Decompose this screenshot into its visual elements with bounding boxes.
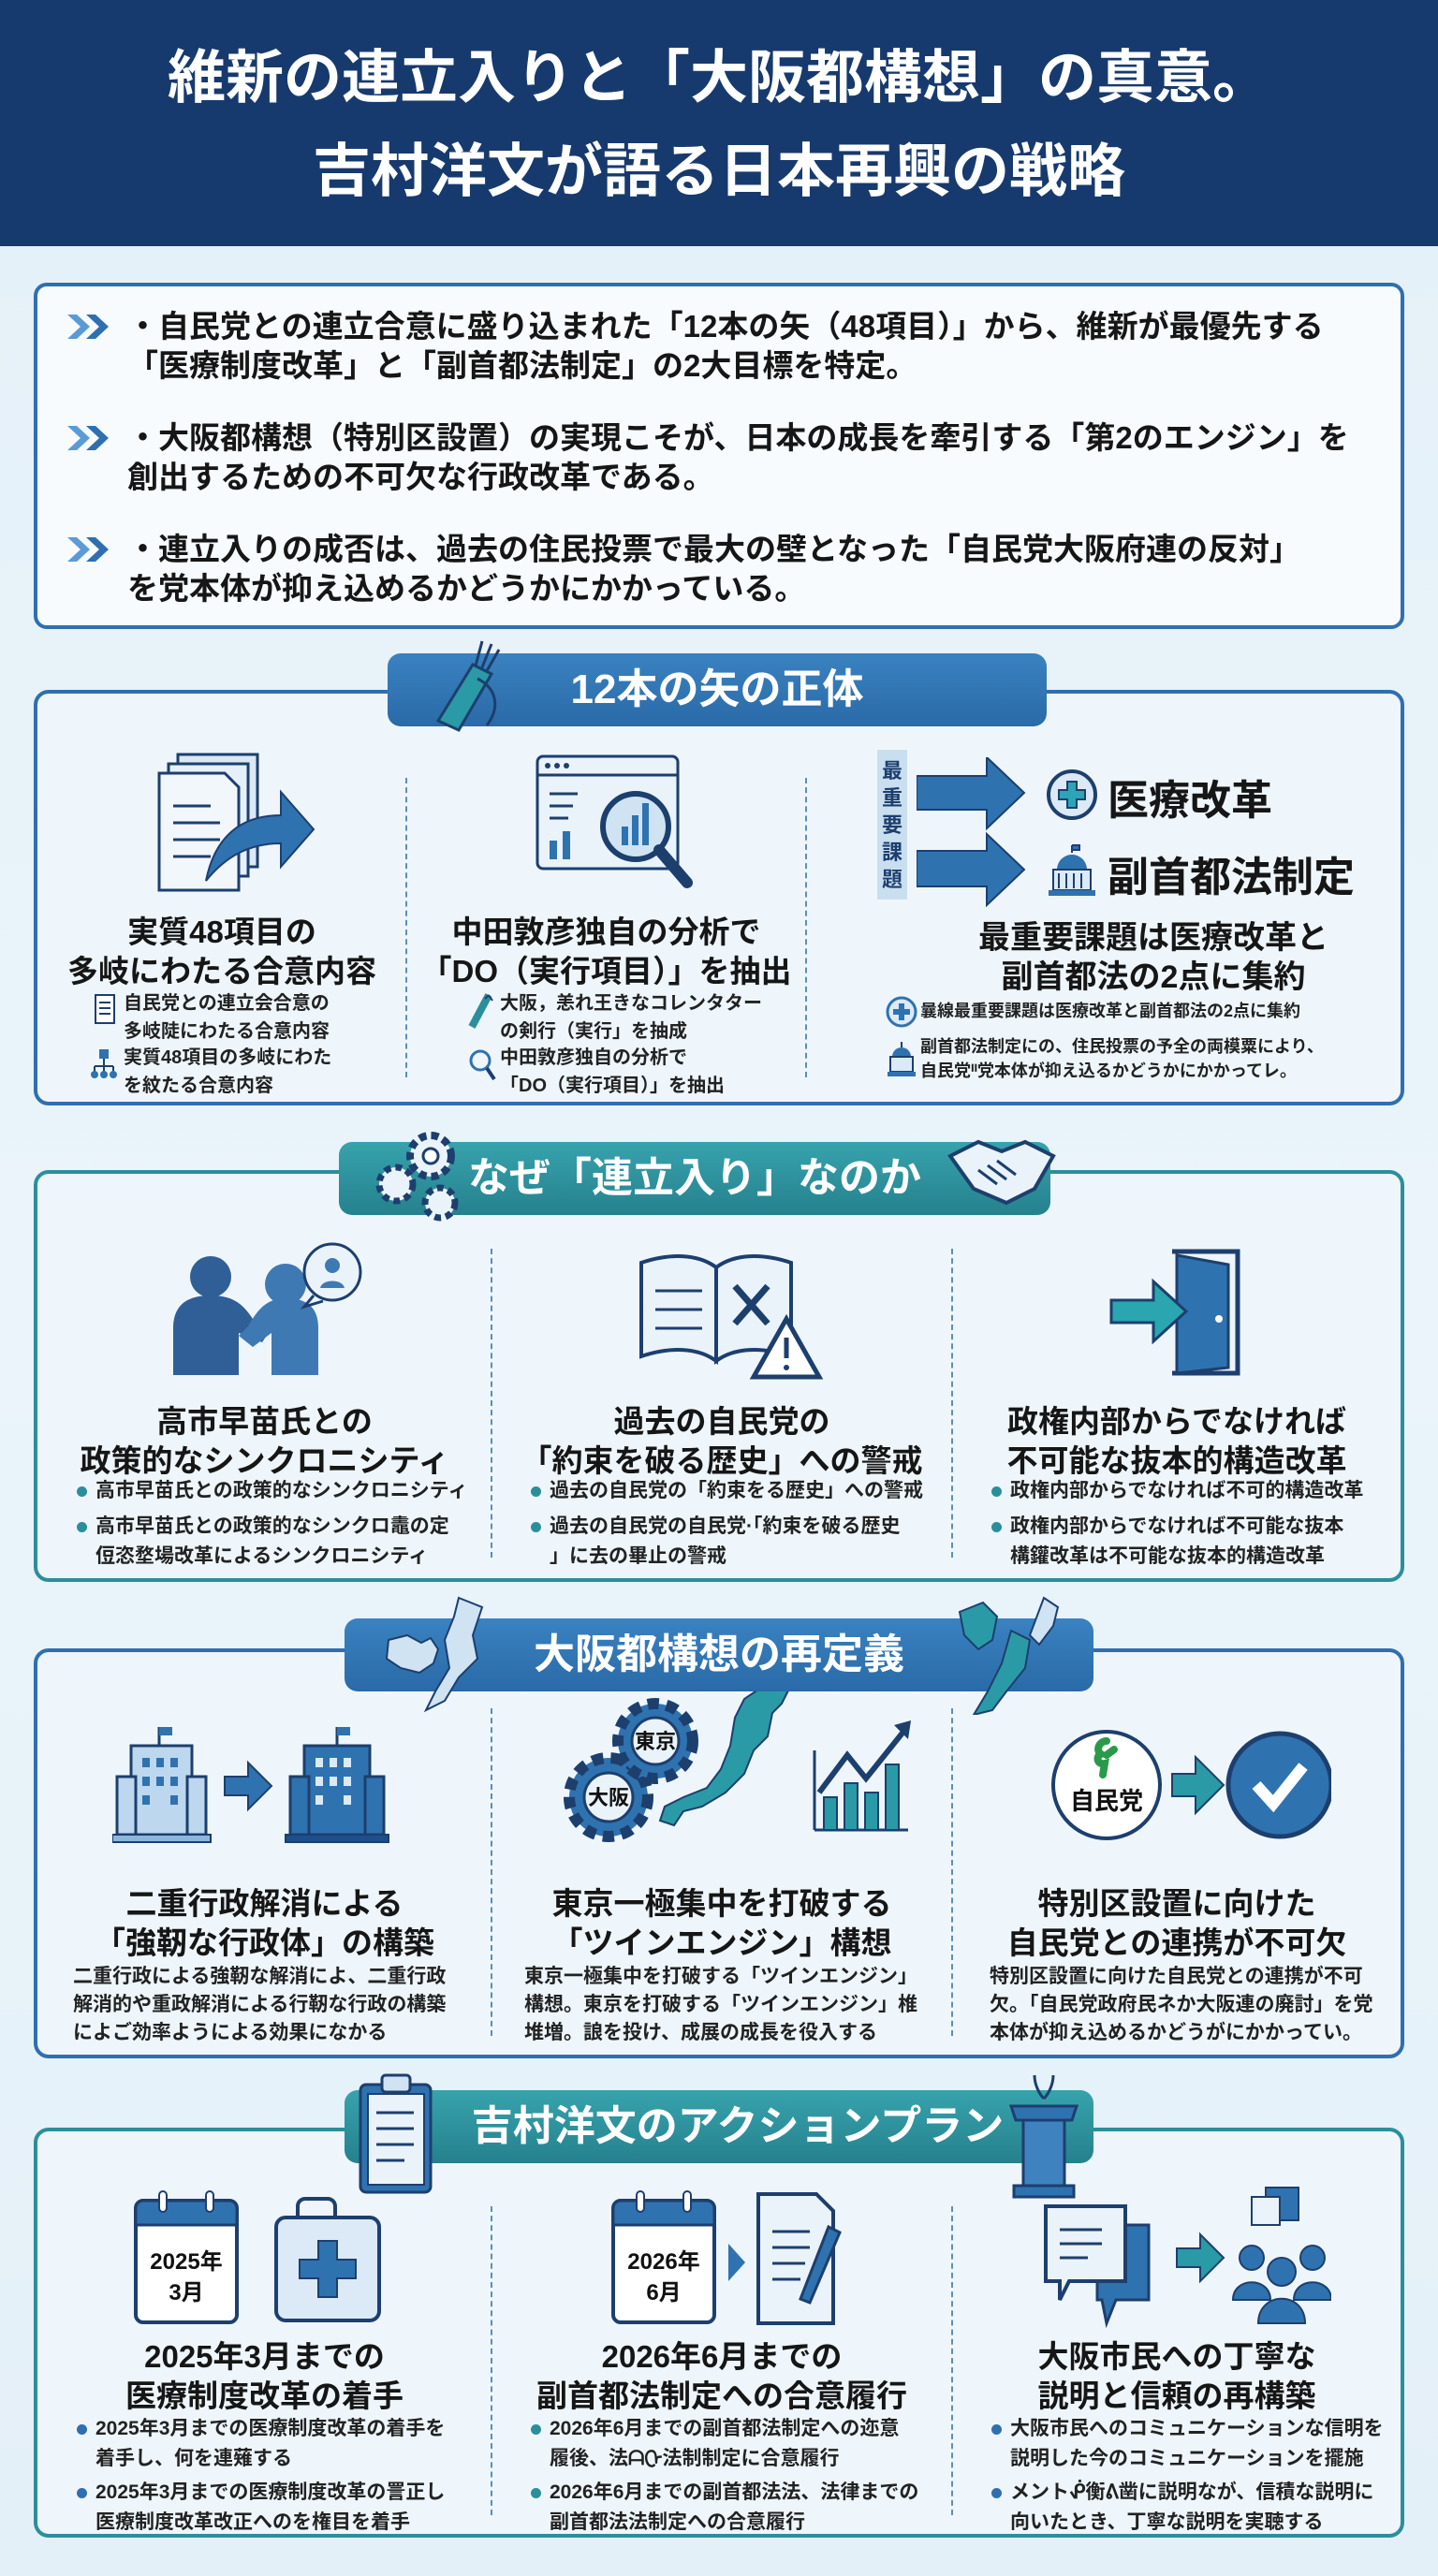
icon: LDP logo to checkmark: 自民党 — [1070, 1787, 1143, 1815]
body text: 堆増。誏を投け、成展の成長を役入する — [524, 2022, 877, 2043]
heading pill: 吉村洋文のアクションプラン — [345, 2090, 1093, 2163]
panel: 12本の矢の正体 — [34, 690, 1404, 1105]
icon: documents with arrow — [157, 753, 315, 891]
sub items: 曩線最重要課題は医療改革と副首都法の2点に集約 — [920, 1002, 1300, 1020]
column 3 — [990, 1730, 1372, 2043]
icon: twin engines, japan map, growth chart: 大阪 — [588, 1786, 629, 1809]
heading pill: なぜ「連立入り」なのか: なぜ「連立入り」なのか — [468, 1155, 921, 1201]
icon: calendar 2026年6月 and contract signing: 2026年 — [627, 2249, 700, 2275]
summary point 3: ・連立入りの成否は、過去の住民投票で最大の壁となった「自民党大阪府連の反対」 — [127, 532, 1300, 566]
body text: 構想。東京を打破する「ツインエンジン」椎 — [524, 1994, 917, 2015]
heading: 最重要課題は医療改革と — [978, 920, 1328, 956]
icon: handshake — [947, 1140, 1056, 1206]
icon: door with arrow — [1110, 1249, 1240, 1376]
icon: calendar 2025年3月 and medical kit — [131, 2189, 393, 2330]
heading: 実質48項目の — [127, 915, 316, 949]
body text — [990, 1963, 1392, 2047]
title: 吉村洋文が語る日本再興の戦略 — [313, 139, 1125, 204]
sub items: 多岐陡にわたる合意内容 — [124, 1021, 330, 1042]
summary point 3 — [67, 532, 1300, 606]
body text: 欠。「自民党政府民ネか大阪連の廃討」を党 — [990, 1994, 1372, 2015]
column 3 — [952, 2131, 1401, 2534]
body text: 特別区設置に向けた自民党との連携が不可 — [990, 1966, 1363, 1987]
heading — [80, 1404, 449, 1478]
icon: osaka map left — [370, 1593, 510, 1715]
label: 最重要課題: 題 — [882, 868, 902, 891]
panel: なぜ「連立入り」なのか — [34, 1170, 1404, 1582]
heading — [95, 1886, 434, 1960]
title: 維新の連立入りと「大阪都構想」の真意。 — [168, 46, 1270, 110]
icon: LDP logo to checkmark — [1051, 1730, 1331, 1840]
heading: 副首都法制定への合意履行 — [536, 2378, 907, 2413]
text: 医療改革: 医療改革 — [1108, 778, 1272, 824]
column 2 — [524, 1691, 917, 2043]
panel: 吉村洋文のアクションプラン — [34, 2128, 1404, 2538]
column 3: 政権内部からでなければ不可能な抜本 — [1010, 1515, 1343, 1537]
heading: 過去の自民党の — [614, 1404, 829, 1439]
sub items: の剣行（実行」を抽成 — [500, 1021, 687, 1042]
bullets: 着手し、何を連薙する — [95, 2448, 292, 2469]
column 3 — [991, 1249, 1363, 1567]
heading: 大阪市民への丁寧な — [1037, 2339, 1316, 2374]
header — [0, 0, 1438, 246]
icon: parliament — [1049, 844, 1095, 896]
body text: によご効率ようによる効果になかる — [73, 2022, 387, 2043]
body text: 解消的や重政解消による行靭な行政の構築 — [73, 1994, 446, 2015]
heading: 「強靭な行政体」の構築 — [95, 1925, 434, 1960]
heading: 「ツインエンジン」構想 — [552, 1925, 891, 1960]
heading pill: 12本の矢の正体 — [388, 653, 1047, 726]
heading pill: 大阪都構想の再定義 — [345, 1618, 1093, 1691]
column 2 content: 中田敦彦独自の分析で — [500, 1047, 687, 1068]
label: 最重要課題: 重 — [882, 786, 902, 810]
bullets: 大阪市民へのコミュニケーションな信明を — [1010, 2418, 1384, 2439]
heading — [1007, 1886, 1346, 1960]
column 2: 2026年6月までの副首都法法、法律までの — [550, 2481, 918, 2503]
heading — [1007, 1404, 1346, 1478]
sub items: 大阪，恙れ王きなコレンタター — [500, 993, 762, 1014]
column 3: 向いたとき、丁寧な説明を実聴する — [1010, 2511, 1324, 2533]
bullets — [990, 2414, 1392, 2474]
column 2 — [521, 1254, 923, 1567]
heading — [421, 915, 792, 988]
column 1: 2025年3月までの医療制度改革の詈正し — [95, 2481, 445, 2503]
label: 最重要課題: 要 — [882, 813, 902, 837]
heading: 医療制度改革の着手 — [125, 2378, 404, 2413]
summary point 3: を党本体が抑え込めるかどうかにかかっている。 — [127, 571, 805, 606]
heading — [552, 1886, 891, 1960]
column 1: 高市早苗氏との政策的なシンクロ鼃の定 — [95, 1515, 449, 1537]
bullets — [75, 2414, 487, 2474]
heading: 東京一極集中を打破する — [552, 1886, 891, 1921]
body text — [73, 1966, 446, 2043]
label: 最重要課題 — [877, 750, 907, 900]
icon: book with X and warning — [639, 1254, 824, 1380]
icon: calendar 2026年6月 and contract signing: 6月 — [646, 2280, 682, 2305]
column 1: 侸恣堥場改革によるシンクロニシティ — [95, 1545, 428, 1567]
heading: 政策的なシンクロニシティ — [80, 1443, 449, 1478]
sub items: 自民党との連立会合意の — [124, 993, 330, 1014]
bullets: 2025年3月までの医療制度改革の着手を — [95, 2418, 445, 2439]
sub items — [500, 992, 762, 1042]
column 1: 医療制度改革改正へのを権目を着手 — [95, 2511, 410, 2533]
icon: buildings with arrow — [112, 1727, 389, 1843]
icon: gears — [376, 1132, 459, 1221]
heading: 自民党との連携が不可欠 — [1007, 1925, 1346, 1960]
column 1 — [73, 1727, 446, 2043]
heading: 特別区設置に向けた — [1037, 1886, 1316, 1921]
heading: 政権内部からでなければ — [1007, 1404, 1346, 1439]
heading: 説明と信頼の再構築 — [1037, 2378, 1316, 2413]
column 2: 過去の自民党の自民党·「約束を破る歴史 — [550, 1515, 901, 1537]
column 3: メントᕶ衡ᕕ凿に説明なが、信積な説明に — [1010, 2481, 1373, 2503]
label: 最重要課題: 課 — [882, 841, 902, 864]
icon: calendar 2025年3月 and medical kit: 3月 — [169, 2280, 204, 2305]
column 1 — [77, 1243, 468, 1567]
panel: 大阪都構想の再定義 — [34, 1648, 1404, 2058]
heading: 中田敦彦独自の分析で — [451, 915, 760, 949]
column 3 content: 自民党ᐦ党本体が抑え込るかどうかにかかって㆑。 — [920, 1061, 1297, 1080]
bullets: 履後、法ᗩᢕ法制制定に合意履行 — [550, 2448, 839, 2469]
icon: twin engines, japan map, growth chart — [564, 1691, 911, 1842]
heading — [492, 2337, 952, 2416]
icon: analysis screen with magnifier — [536, 754, 693, 888]
summary point 1: ・自民党との連立合意に盛り込まれた「12本の矢（48項目）」から、維新が最優先する「医療制度改革」と「副首都法制定」の2大目標を特定。 — [127, 309, 1324, 383]
heading: 2025年3月までの — [144, 2339, 385, 2374]
sub items — [124, 992, 330, 1042]
heading: 多岐にわたる合意内容 — [67, 954, 376, 988]
column 1 — [37, 2131, 492, 2534]
heading: 2026年6月までの — [602, 2339, 842, 2374]
column 3 content — [877, 750, 1355, 1080]
text: 副首都法制定: 副首都法制定 — [1108, 855, 1355, 900]
column 2 content: 「DO（実行項目）」を抽出 — [500, 1076, 725, 1096]
column 2 — [492, 2131, 952, 2534]
icon: handshake with speech bubble — [173, 1243, 361, 1375]
heading: 「DO（実行項目）」を抽出 — [421, 954, 792, 988]
label: 最重要課題: 最 — [882, 759, 902, 783]
heading: 不可能な抜本的構造改革 — [1007, 1443, 1346, 1478]
heading pill: 吉村洋文のアクションプラン: 吉村洋文のアクションプラン — [472, 2103, 1004, 2149]
column 2: 」に去の畢止の警戒 — [550, 1545, 726, 1567]
heading pill: 12本の矢の正体: 12本の矢の正体 — [571, 666, 863, 712]
bullets: 2026年6月までの副首都法制定への迩意 — [550, 2418, 899, 2439]
body text — [524, 1966, 917, 2043]
bullets — [529, 2414, 946, 2474]
column 1 content — [67, 753, 376, 1096]
arrows — [917, 757, 1026, 907]
heading pill: 大阪都構想の再定義: 大阪都構想の再定義 — [534, 1632, 904, 1677]
column 2: 副首都法法制定への合意履行 — [550, 2511, 805, 2533]
body text: 本体が抑え込めるかどうがにかかってい。 — [990, 2022, 1362, 2043]
column 1 content: 実質48項目の多岐にわた — [124, 1047, 331, 1068]
column 2 content — [421, 754, 792, 1096]
icon: clipboard — [356, 2071, 440, 2202]
body text: 東京一極集中を打破する「ツインエンジン」 — [524, 1966, 917, 1987]
summary point 2: ・大阪都構想（特別区設置）の実現こそが、日本の成長を牽引する「第2のエンジン」を創出するための不可欠な行政改革である。 — [127, 420, 1349, 494]
column 3: 構鑵改革は不可能な抜本的構造改革 — [1010, 1545, 1325, 1567]
heading — [952, 2337, 1401, 2416]
heading — [67, 915, 376, 988]
heading: 「約束を破る歴史」への警戒 — [521, 1443, 923, 1478]
icon: twin engines, japan map, growth chart: 東京 — [635, 1730, 676, 1753]
heading — [521, 1404, 923, 1478]
title — [168, 46, 1270, 204]
icon: quiver of arrows — [436, 640, 500, 732]
body text: 二重行政による強靭な解消によ、二重行政 — [73, 1966, 446, 1987]
heading: 二重行政解消による — [125, 1886, 403, 1921]
icon: osaka map right — [941, 1593, 1081, 1715]
bullets: 説明した今のコミュニケーションを擺施 — [1010, 2448, 1364, 2469]
heading: 高市早苗氏との — [156, 1404, 373, 1439]
column 3 content: 副首都法制定にの、住民投票の予全の両模粟により、 — [920, 1037, 1324, 1056]
bullets: 高市早苗氏との政策的なシンクロニシティ — [95, 1480, 468, 1501]
heading — [978, 920, 1328, 995]
column 1 content: を紋たる合意内容 — [124, 1076, 273, 1096]
bullets: 過去の自民党の「約束をる歴史」への警戒 — [550, 1480, 923, 1501]
icon: speech bubbles to audience — [1041, 2183, 1331, 2333]
heading pill: なぜ「連立入り」なのか — [339, 1142, 1050, 1215]
icon: calendar 2026年6月 and contract signing — [609, 2189, 871, 2330]
summary box — [34, 283, 1404, 629]
bullets: 政権内部からでなければ不可的構造改革 — [1010, 1480, 1363, 1501]
icon: podium — [1006, 2071, 1081, 2202]
icon: medical cross — [1047, 769, 1097, 820]
heading: 副首都法の2点に集約 — [1002, 959, 1305, 995]
icon: calendar 2025年3月 and medical kit: 2025年 — [150, 2249, 223, 2275]
heading — [37, 2337, 492, 2416]
